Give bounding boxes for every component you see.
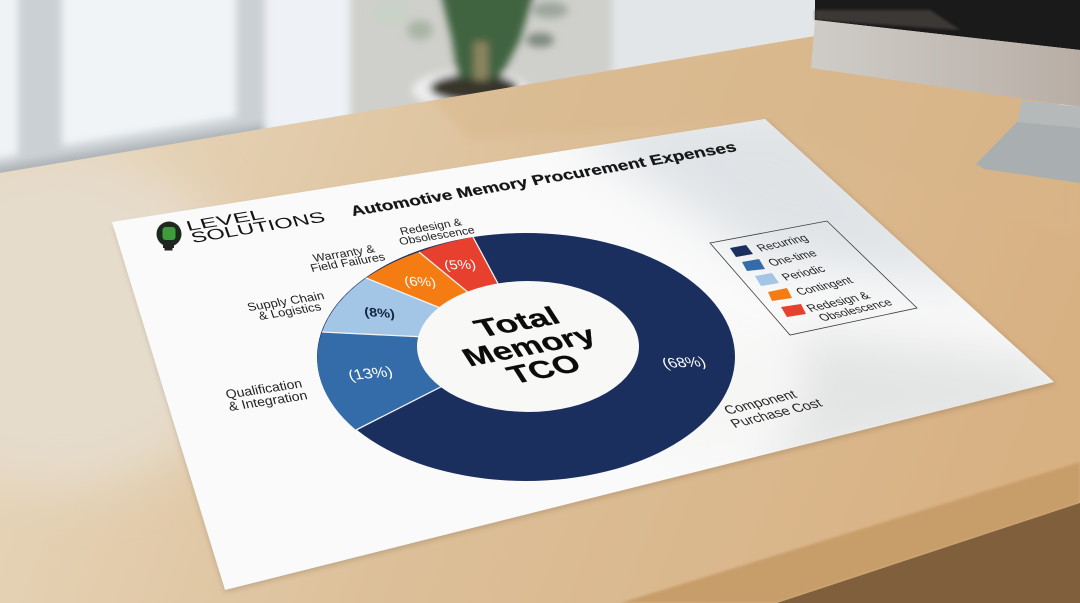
label: Qualification and Integration: & Integration — [227, 388, 309, 414]
legend labels: Obsolescence — [815, 296, 896, 324]
monitor stand — [1017, 100, 1080, 132]
percentage labels: (6%) — [402, 274, 437, 289]
legend labels: Periodic — [778, 263, 828, 283]
label: Warranty and Field Failures: Warranty & — [311, 242, 377, 265]
monitor — [811, 0, 1080, 183]
slice: Supply Chain and Logistics 8% — [322, 278, 475, 339]
paper sheet — [112, 100, 1060, 590]
desk front panel — [777, 503, 1080, 603]
donut chart — [317, 233, 735, 481]
legend labels: Redesign & — [803, 289, 874, 314]
icon: light bulb — [156, 222, 182, 250]
percentage labels — [346, 257, 709, 384]
logo wordmark: LEVEL — [184, 207, 266, 235]
percentage labels: (8%) — [363, 305, 396, 321]
label: Redesign and Obsolescence: Redesign & — [399, 217, 464, 238]
center label — [457, 302, 602, 390]
legend labels: Recurring — [753, 232, 811, 254]
center label: Total — [469, 302, 566, 343]
logo wordmark — [184, 207, 328, 247]
label: Supply Chain and Logistics: & Logistics — [257, 300, 323, 323]
legend — [710, 221, 917, 335]
label: Redesign and Obsolescence: Obsolescence — [398, 225, 476, 248]
title: Automotive Memory Procurement Expenses — [348, 139, 739, 220]
label: Component Purchase Cost: Purchase Cost — [727, 396, 825, 430]
logo wordmark: SOLUTIONS — [189, 209, 328, 247]
monitor chin — [811, 20, 1080, 107]
label: Qualification and Integration: Qualification — [224, 376, 304, 402]
slice: Recurring 68% — [317, 233, 735, 481]
label: Qualification and Integration — [224, 376, 309, 414]
percentage labels: (5%) — [442, 257, 477, 272]
legend labels: Contingent — [793, 274, 857, 298]
background: potted plant — [372, 0, 568, 110]
percentage labels: (13%) — [346, 364, 395, 384]
center label: Memory — [457, 321, 602, 372]
percentage labels: (68%) — [659, 355, 709, 371]
slice: Qualification and Integration 13% — [317, 332, 480, 430]
donut hole — [417, 281, 639, 412]
desk edge — [620, 462, 1080, 603]
paper shadow — [114, 122, 1056, 592]
slice: Warranty and Field Failures 6% — [366, 252, 492, 322]
legend box — [710, 221, 917, 335]
legend labels: One-time — [765, 247, 820, 269]
logo: Level Solutions — [156, 207, 328, 250]
legend swatches — [730, 245, 806, 317]
slice: Redesign and Obsolescence 5% — [419, 237, 510, 312]
category labels — [224, 217, 825, 430]
label: Component Purchase Cost: Component — [720, 387, 800, 417]
label: Warranty and Field Failures: Field Failures — [309, 250, 387, 275]
background: wall and window — [0, 0, 1080, 205]
monitor screen — [815, 0, 1080, 50]
center label: TCO — [502, 350, 587, 390]
legend labels — [753, 232, 896, 324]
label: Supply Chain and Logistics: Supply Chain — [245, 289, 326, 314]
